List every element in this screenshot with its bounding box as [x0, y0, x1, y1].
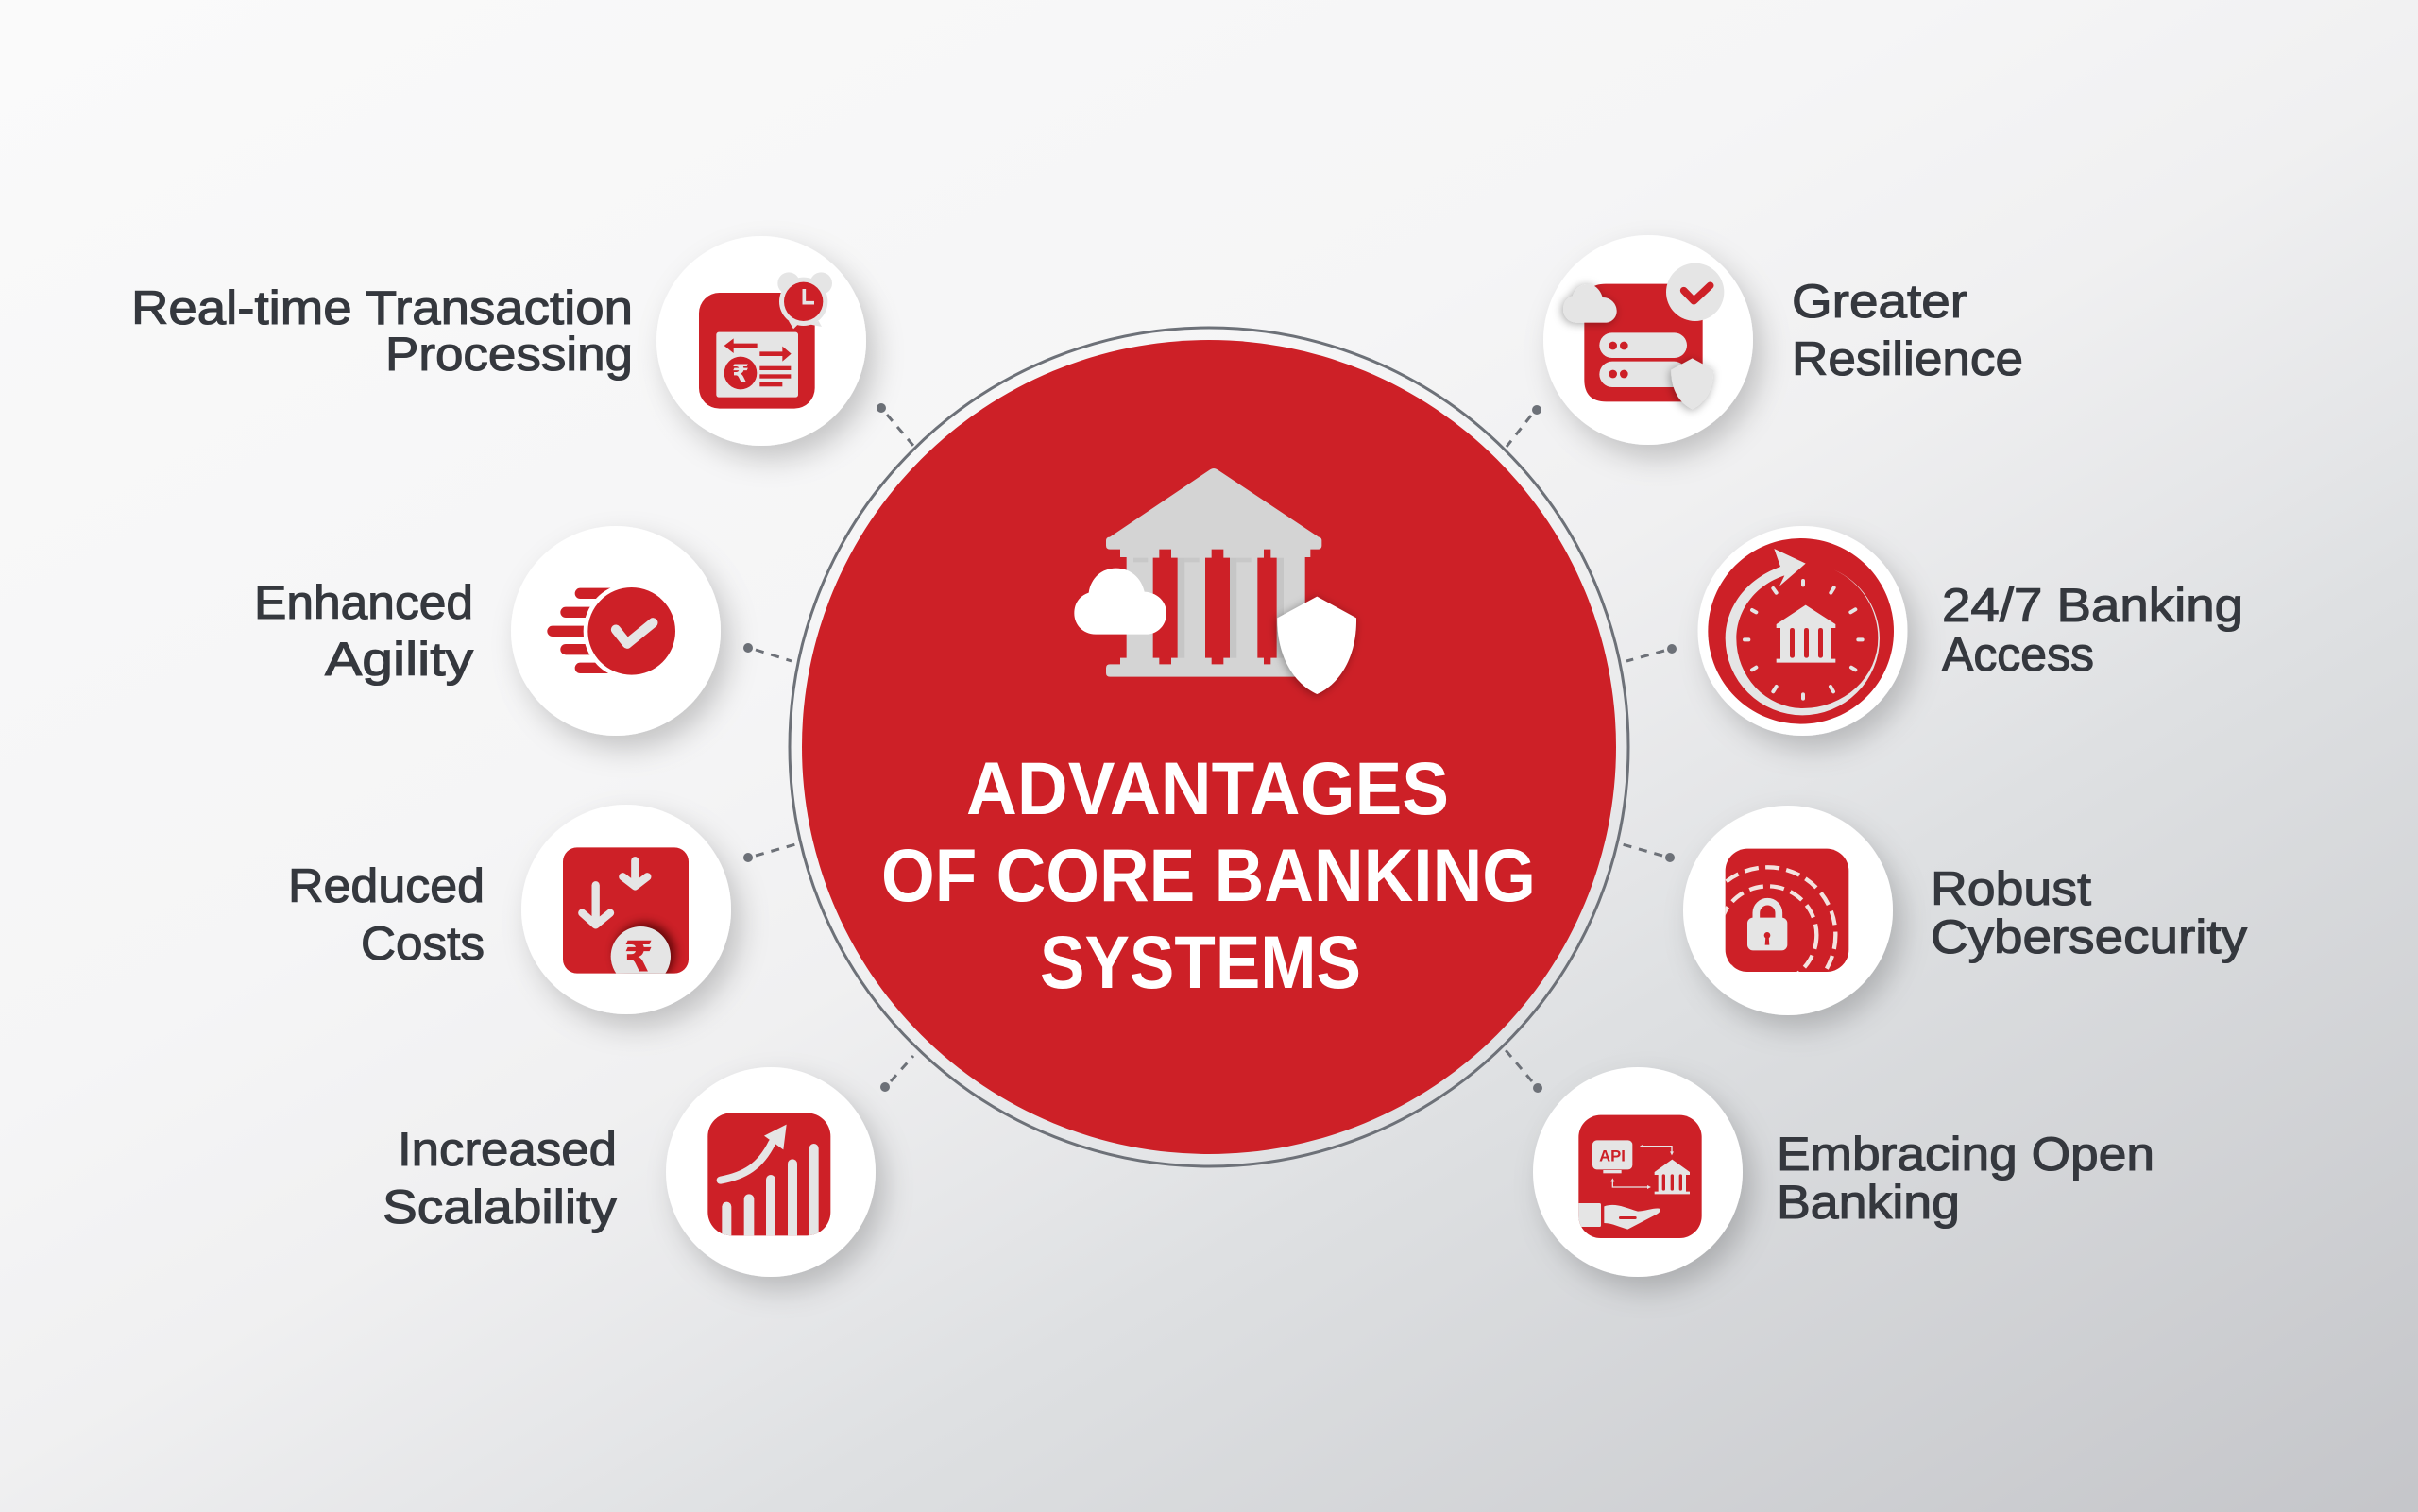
label: Resilience — [1792, 332, 2023, 385]
icon: transaction card with alarm clock — [699, 272, 832, 409]
icon: servers with cloud, check and shield — [1563, 263, 1724, 409]
central circle panel — [790, 328, 1628, 1166]
label: Cybersecurity — [1931, 910, 2247, 963]
label: Increased — [398, 1123, 617, 1176]
panel: enhanced agility — [254, 526, 721, 736]
label: Processing — [385, 328, 633, 381]
label: Reduced — [288, 859, 485, 912]
cloud — [1074, 569, 1166, 635]
label: Greater — [1792, 275, 1967, 328]
label: Costs — [361, 917, 485, 970]
outer ring — [790, 328, 1628, 1166]
panel: 24/7 banking access — [1698, 526, 2243, 736]
icon badge circle — [666, 1067, 876, 1277]
label — [1792, 275, 2023, 385]
label — [131, 281, 633, 381]
icon: bank with cloud and shield — [1074, 468, 1356, 694]
title: ADVANTAGES — [966, 746, 1449, 830]
icon badge circle — [656, 236, 866, 446]
icon: 24/7 clock with bank — [1708, 538, 1894, 724]
label: Embracing Open — [1777, 1128, 2154, 1181]
label — [1931, 862, 2247, 963]
icon: transaction card with alarm clock: ₹ — [732, 361, 749, 389]
label: Real-time Transaction — [131, 281, 633, 334]
label — [254, 576, 473, 686]
icon badge circle — [511, 526, 721, 736]
icon badge circle — [1543, 235, 1753, 445]
panel: embracing open banking — [1533, 1067, 2154, 1277]
icon: falling arrows and rupee coin — [563, 847, 689, 986]
icon: padlock with dashed rings — [1725, 848, 1849, 972]
label — [288, 859, 485, 970]
panel: increased scalability — [383, 1067, 876, 1277]
icon badge circle — [1683, 806, 1893, 1015]
panel: robust cybersecurity — [1683, 806, 2247, 1015]
connectors: dashed lines with dots — [743, 403, 1677, 1093]
icon badge circle — [1533, 1067, 1743, 1277]
icon badge circle — [521, 805, 731, 1014]
red disc — [802, 340, 1616, 1154]
label: Robust — [1931, 862, 2091, 915]
icon badge circle — [1698, 526, 1908, 736]
panel: real-time transaction processing — [131, 236, 866, 446]
label: Access — [1942, 628, 2094, 681]
icon: API, bank and open hand — [1575, 1115, 1702, 1238]
label — [1942, 579, 2243, 681]
shield — [1277, 597, 1356, 694]
title: OF CORE BANKING — [881, 833, 1536, 917]
icon: falling arrows and rupee coin: ₹ — [623, 931, 654, 981]
icon: fast check badge — [547, 583, 680, 679]
label: Agility — [325, 633, 473, 686]
icon: growth bars with arrow — [707, 1113, 830, 1241]
label: Scalability — [383, 1181, 617, 1233]
label: Enhanced — [254, 576, 473, 629]
panel: reduced costs — [288, 805, 731, 1014]
label: Banking — [1777, 1176, 1960, 1229]
title: SYSTEMS — [1040, 920, 1361, 1004]
icon: API, bank and open hand: API — [1599, 1147, 1626, 1165]
label — [1777, 1128, 2154, 1229]
panel: greater resilience — [1543, 235, 2023, 445]
label: 24/7 Banking — [1942, 579, 2243, 632]
title — [881, 746, 1536, 1004]
label — [383, 1123, 617, 1233]
